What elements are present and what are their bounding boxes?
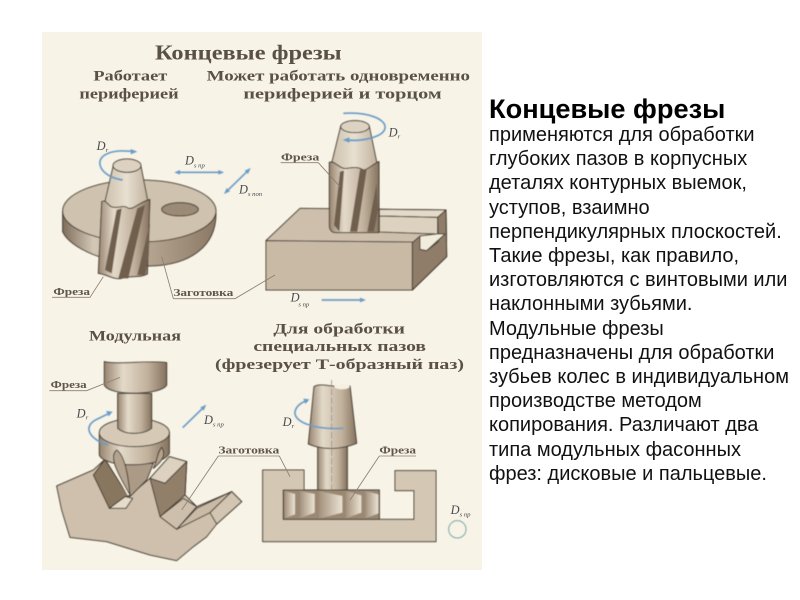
callout labels [52, 153, 340, 299]
subheading: periphery and face: Может работать одновременно [207, 69, 470, 85]
workpiece block [266, 208, 447, 290]
bottom labels [49, 302, 471, 519]
text block: description: изготовляются с винтовыми или [489, 269, 787, 291]
gear workpiece [57, 457, 242, 561]
motion arrows [100, 113, 385, 302]
end mill [98, 159, 150, 279]
modular cutter [99, 362, 169, 497]
feed and rotation labels: D [97, 139, 106, 153]
callout labels: Заготовка [218, 446, 279, 457]
feed and rotation labels: D [185, 154, 194, 168]
feed and rotation labels: r [398, 134, 401, 141]
callout labels: Фреза [51, 380, 87, 391]
feed and rotation labels: D [77, 406, 86, 420]
feed and rotation labels: s пр [194, 162, 205, 169]
callout labels [49, 377, 416, 510]
text block: description: уступов, взаимно [489, 197, 650, 219]
feed and rotation labels: s поп [248, 191, 263, 198]
feed and rotation labels: D [451, 503, 460, 517]
heading: special slots [215, 321, 464, 373]
text block: description: копирования. Различают два [489, 414, 758, 436]
feed and rotation labels: r [106, 147, 109, 154]
text block: description: производстве методом [489, 390, 702, 412]
heading: modular: Модульная [89, 329, 181, 345]
subheading: periphery and face [207, 69, 470, 102]
feed and rotation labels: s пр [298, 302, 310, 309]
text block: description: фрез: дисковые и пальцевые. [489, 463, 767, 485]
text block: description: наклонными зубьями. [489, 293, 692, 315]
heading: special slots: специальных пазов [253, 339, 426, 355]
text block: description: типа модульных фасонных [489, 439, 741, 461]
feed and rotation labels [76, 302, 471, 519]
text block: description: предназначены для обработки [489, 342, 774, 364]
feed and rotation labels: D [389, 126, 398, 140]
heading: end mills: Концевые фрезы [155, 42, 342, 64]
feed and rotation labels: D [290, 291, 300, 305]
subheading: periphery: Работает [93, 69, 167, 85]
text block: description: глубоких пазов в корпусных [489, 148, 747, 170]
subheading: periphery: периферией [79, 86, 179, 102]
text block: description: деталях контурных выемок, [489, 172, 747, 194]
callout labels: Заготовка [173, 288, 233, 299]
top labels [52, 42, 470, 305]
text block: description: Такие фрезы, как правило, [489, 245, 739, 267]
callout labels: Фреза [281, 153, 319, 164]
figure: block workpiece with end mill [266, 121, 447, 290]
end mill [329, 121, 379, 233]
text block: description: зубьев колес в индивидуальном [489, 366, 789, 388]
text block: description: применяются для обработки [489, 124, 755, 146]
feed symbol [449, 521, 466, 538]
callout labels: Фреза [379, 446, 416, 457]
feed and rotation labels: D [204, 413, 213, 427]
text block: description: перпендикулярных плоскостей. [489, 221, 782, 243]
motion arrows [89, 399, 309, 445]
figure: T-slot cutter [263, 380, 466, 542]
subheading: periphery and face: периферией и торцом [243, 86, 442, 102]
T-slot cutter [283, 380, 379, 519]
subheading: periphery [79, 69, 179, 102]
feed and rotation labels: r [86, 414, 89, 421]
arrow: rotation [295, 401, 343, 429]
heading: special slots: (фрезерует Т-образный паз) [215, 357, 464, 373]
figure: disc workpiece with end mill [63, 159, 216, 279]
figure: modular cutter on gear [57, 362, 242, 561]
feed and rotation labels: D [239, 182, 248, 196]
heading: special slots: Для обработки [273, 321, 405, 337]
feed and rotation labels [96, 126, 401, 305]
text block: description: Модульные фрезы [489, 318, 664, 340]
feed and rotation labels: r [292, 423, 295, 430]
callout labels: Фреза [53, 287, 90, 298]
T-slot workpiece [263, 470, 436, 542]
feed and rotation labels: D [283, 415, 292, 429]
text heading: Концевые фрезы [489, 93, 725, 124]
feed and rotation labels: s пр [460, 512, 471, 519]
feed and rotation labels: s пр [213, 422, 224, 429]
text block: description [489, 93, 789, 485]
workpiece disc [63, 180, 216, 266]
